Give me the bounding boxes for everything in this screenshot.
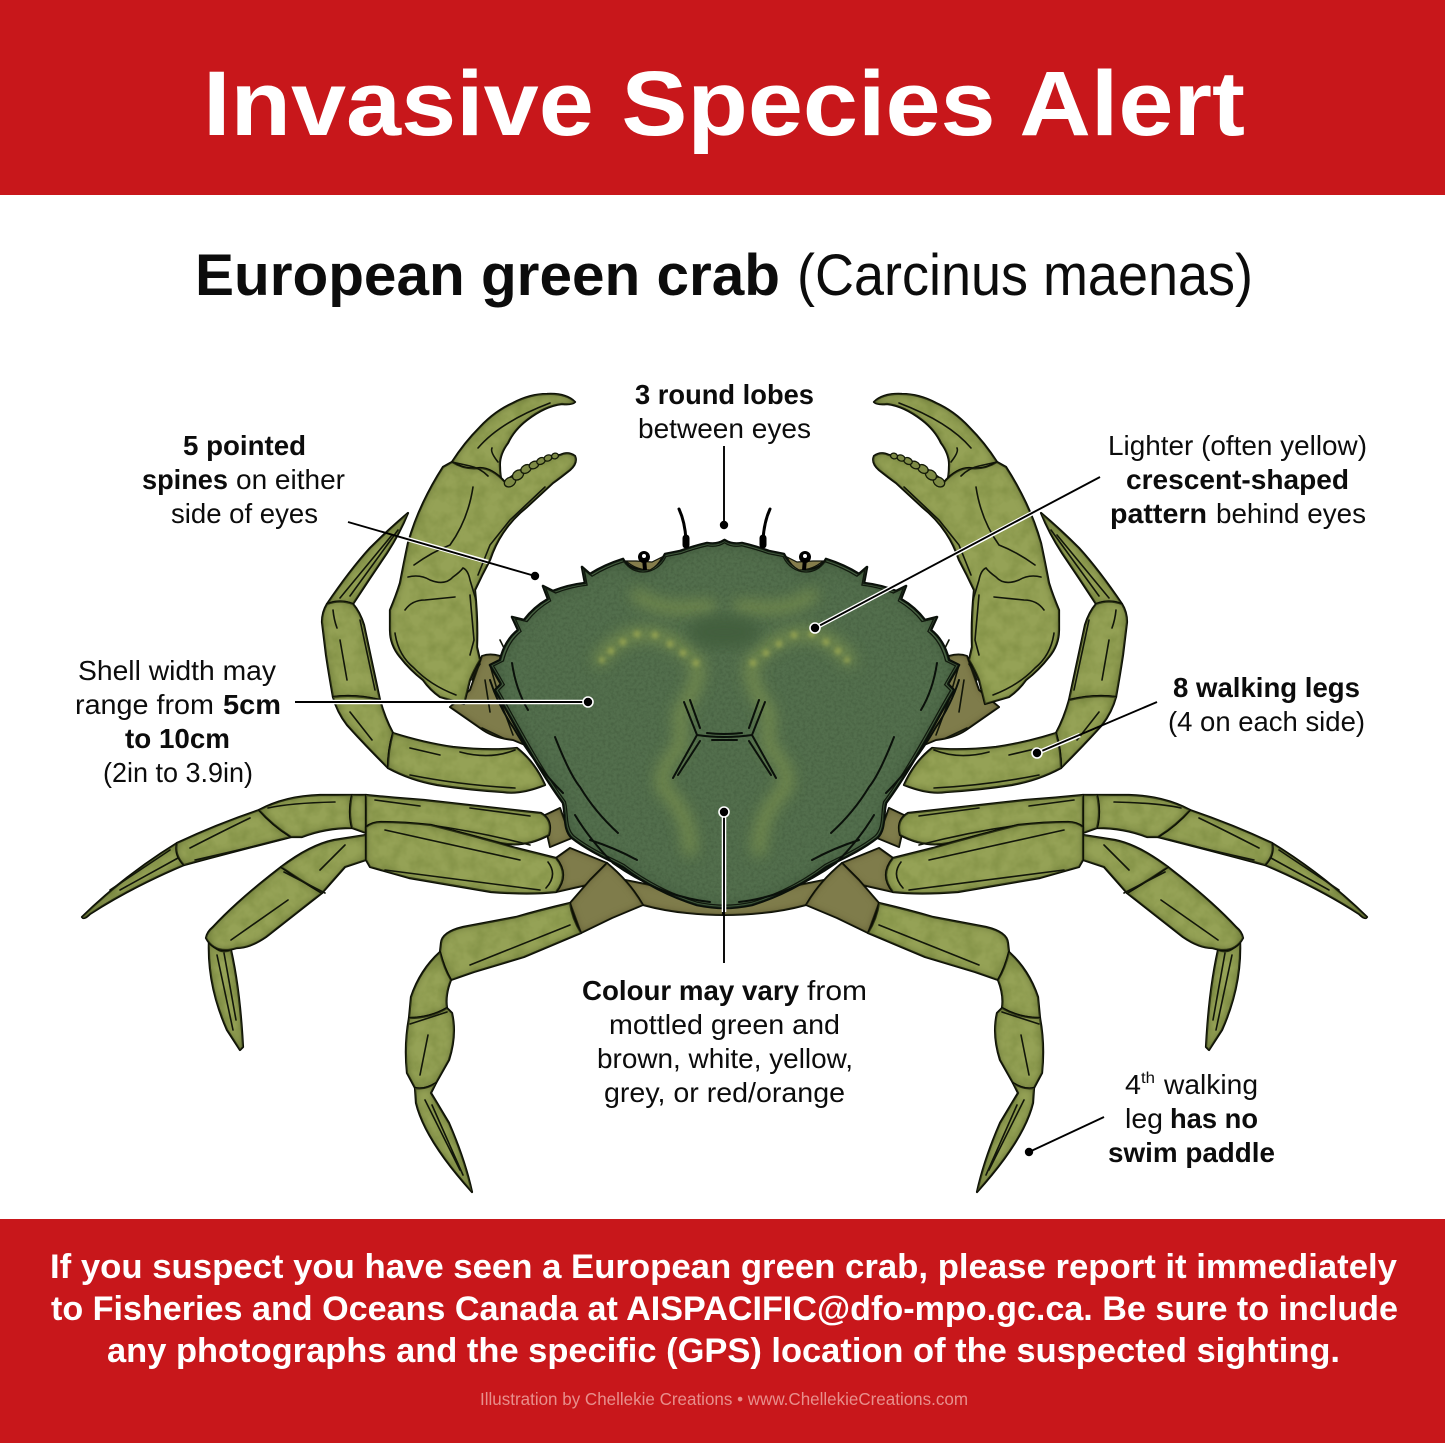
orbits and eyes [626, 551, 823, 570]
callout: crescent-shaped pattern: crescent-shaped [1126, 464, 1349, 495]
callout: 4th walking leg: leg [1125, 1103, 1163, 1134]
crescent pattern and markings [494, 543, 955, 905]
carapace lines [490, 663, 959, 902]
callout: colour may vary: from [807, 975, 867, 1006]
callout: shell width: 5cm [223, 689, 281, 720]
callout: colour may vary [582, 807, 867, 1108]
callout: colour may vary: Colour may vary [582, 975, 799, 1006]
callout: crescent-shaped pattern: behind eyes [1216, 498, 1366, 529]
callout: 5 pointed spines: on either [236, 464, 345, 495]
callout: colour may vary: brown, white, yellow, [597, 1043, 853, 1074]
callout: shell width: Shell width may [78, 655, 276, 686]
callout: 3 round lobes [635, 379, 814, 529]
callout: 4th walking leg: 4 [1125, 1069, 1141, 1100]
callout: colour may vary: grey, or red/orange [604, 1077, 845, 1108]
callout: crescent-shaped pattern: pattern [1110, 498, 1207, 529]
rear body joints [450, 654, 726, 933]
callout: crescent-shaped pattern: Lighter (often yellow) [1108, 430, 1367, 461]
subtitle [195, 243, 1253, 308]
callout: crescent-shaped pattern [810, 430, 1367, 633]
icon: left eye [638, 551, 650, 570]
callout: 4th walking leg: has no [1170, 1103, 1258, 1134]
callout: 8 walking legs: 8 walking legs [1173, 672, 1360, 703]
top banner [0, 0, 1445, 195]
callout: colour may vary: mottled green and [609, 1009, 840, 1040]
footer banner [0, 1219, 1445, 1443]
callout: 5 pointed spines: 5 pointed [183, 430, 306, 461]
left half of limbs [82, 394, 726, 1192]
walking leg 3 [206, 822, 563, 1050]
callout: 5 pointed spines: spines [142, 464, 228, 495]
callout: 8 walking legs: (4 on each side) [1168, 706, 1365, 737]
icon: right eye [799, 551, 811, 570]
antennae [679, 509, 770, 545]
callout: 4th walking leg [1025, 1069, 1275, 1168]
shell [490, 540, 959, 908]
callout: 5 pointed spines [142, 430, 539, 580]
inner rim outline [494, 543, 955, 905]
subtitle: (Carcinus maenas) [797, 243, 1253, 308]
callout: 3 round lobes: 3 round lobes [635, 379, 814, 410]
callout: 3 round lobes: between eyes [638, 413, 811, 444]
claw [390, 394, 576, 738]
right half of limbs (mirror) [723, 394, 1367, 1192]
report instructions: to Fisheries and Oceans Canada at AISPACIFIC@dfo-mpo.gc.ca. Be sure to include [51, 1290, 1398, 1328]
title: Invasive Species Alert [203, 53, 1245, 155]
illustration: European green crab [82, 394, 1367, 1192]
callout: 5 pointed spines: side of eyes [171, 498, 318, 529]
walking leg 1 [322, 513, 545, 793]
walking leg 4 [406, 903, 581, 1192]
callout: 4th walking leg: swim paddle [1108, 1137, 1275, 1168]
callout: shell width: (2in to 3.9in) [103, 757, 253, 788]
callout: 4th walking leg: walking [1163, 1069, 1258, 1100]
callout: shell width: to 10cm [125, 723, 230, 754]
report instructions [50, 1248, 1398, 1370]
report instructions: any photographs and the specific (GPS) location of the suspected sighting. [107, 1332, 1340, 1370]
report instructions: If you suspect you have seen a European green crab, please report it immediately [50, 1248, 1397, 1286]
callout: shell width: range from [75, 689, 214, 720]
callout: 8 walking legs [1032, 672, 1365, 758]
subtitle: European green crab [195, 243, 780, 308]
callout: shell width [75, 655, 593, 788]
callout: 4th walking leg: th [1141, 1070, 1155, 1087]
illustration credit: Illustration by Chellekie Creations • www.ChellekieCreations.com [480, 1389, 968, 1409]
walking leg 2 [82, 795, 550, 918]
